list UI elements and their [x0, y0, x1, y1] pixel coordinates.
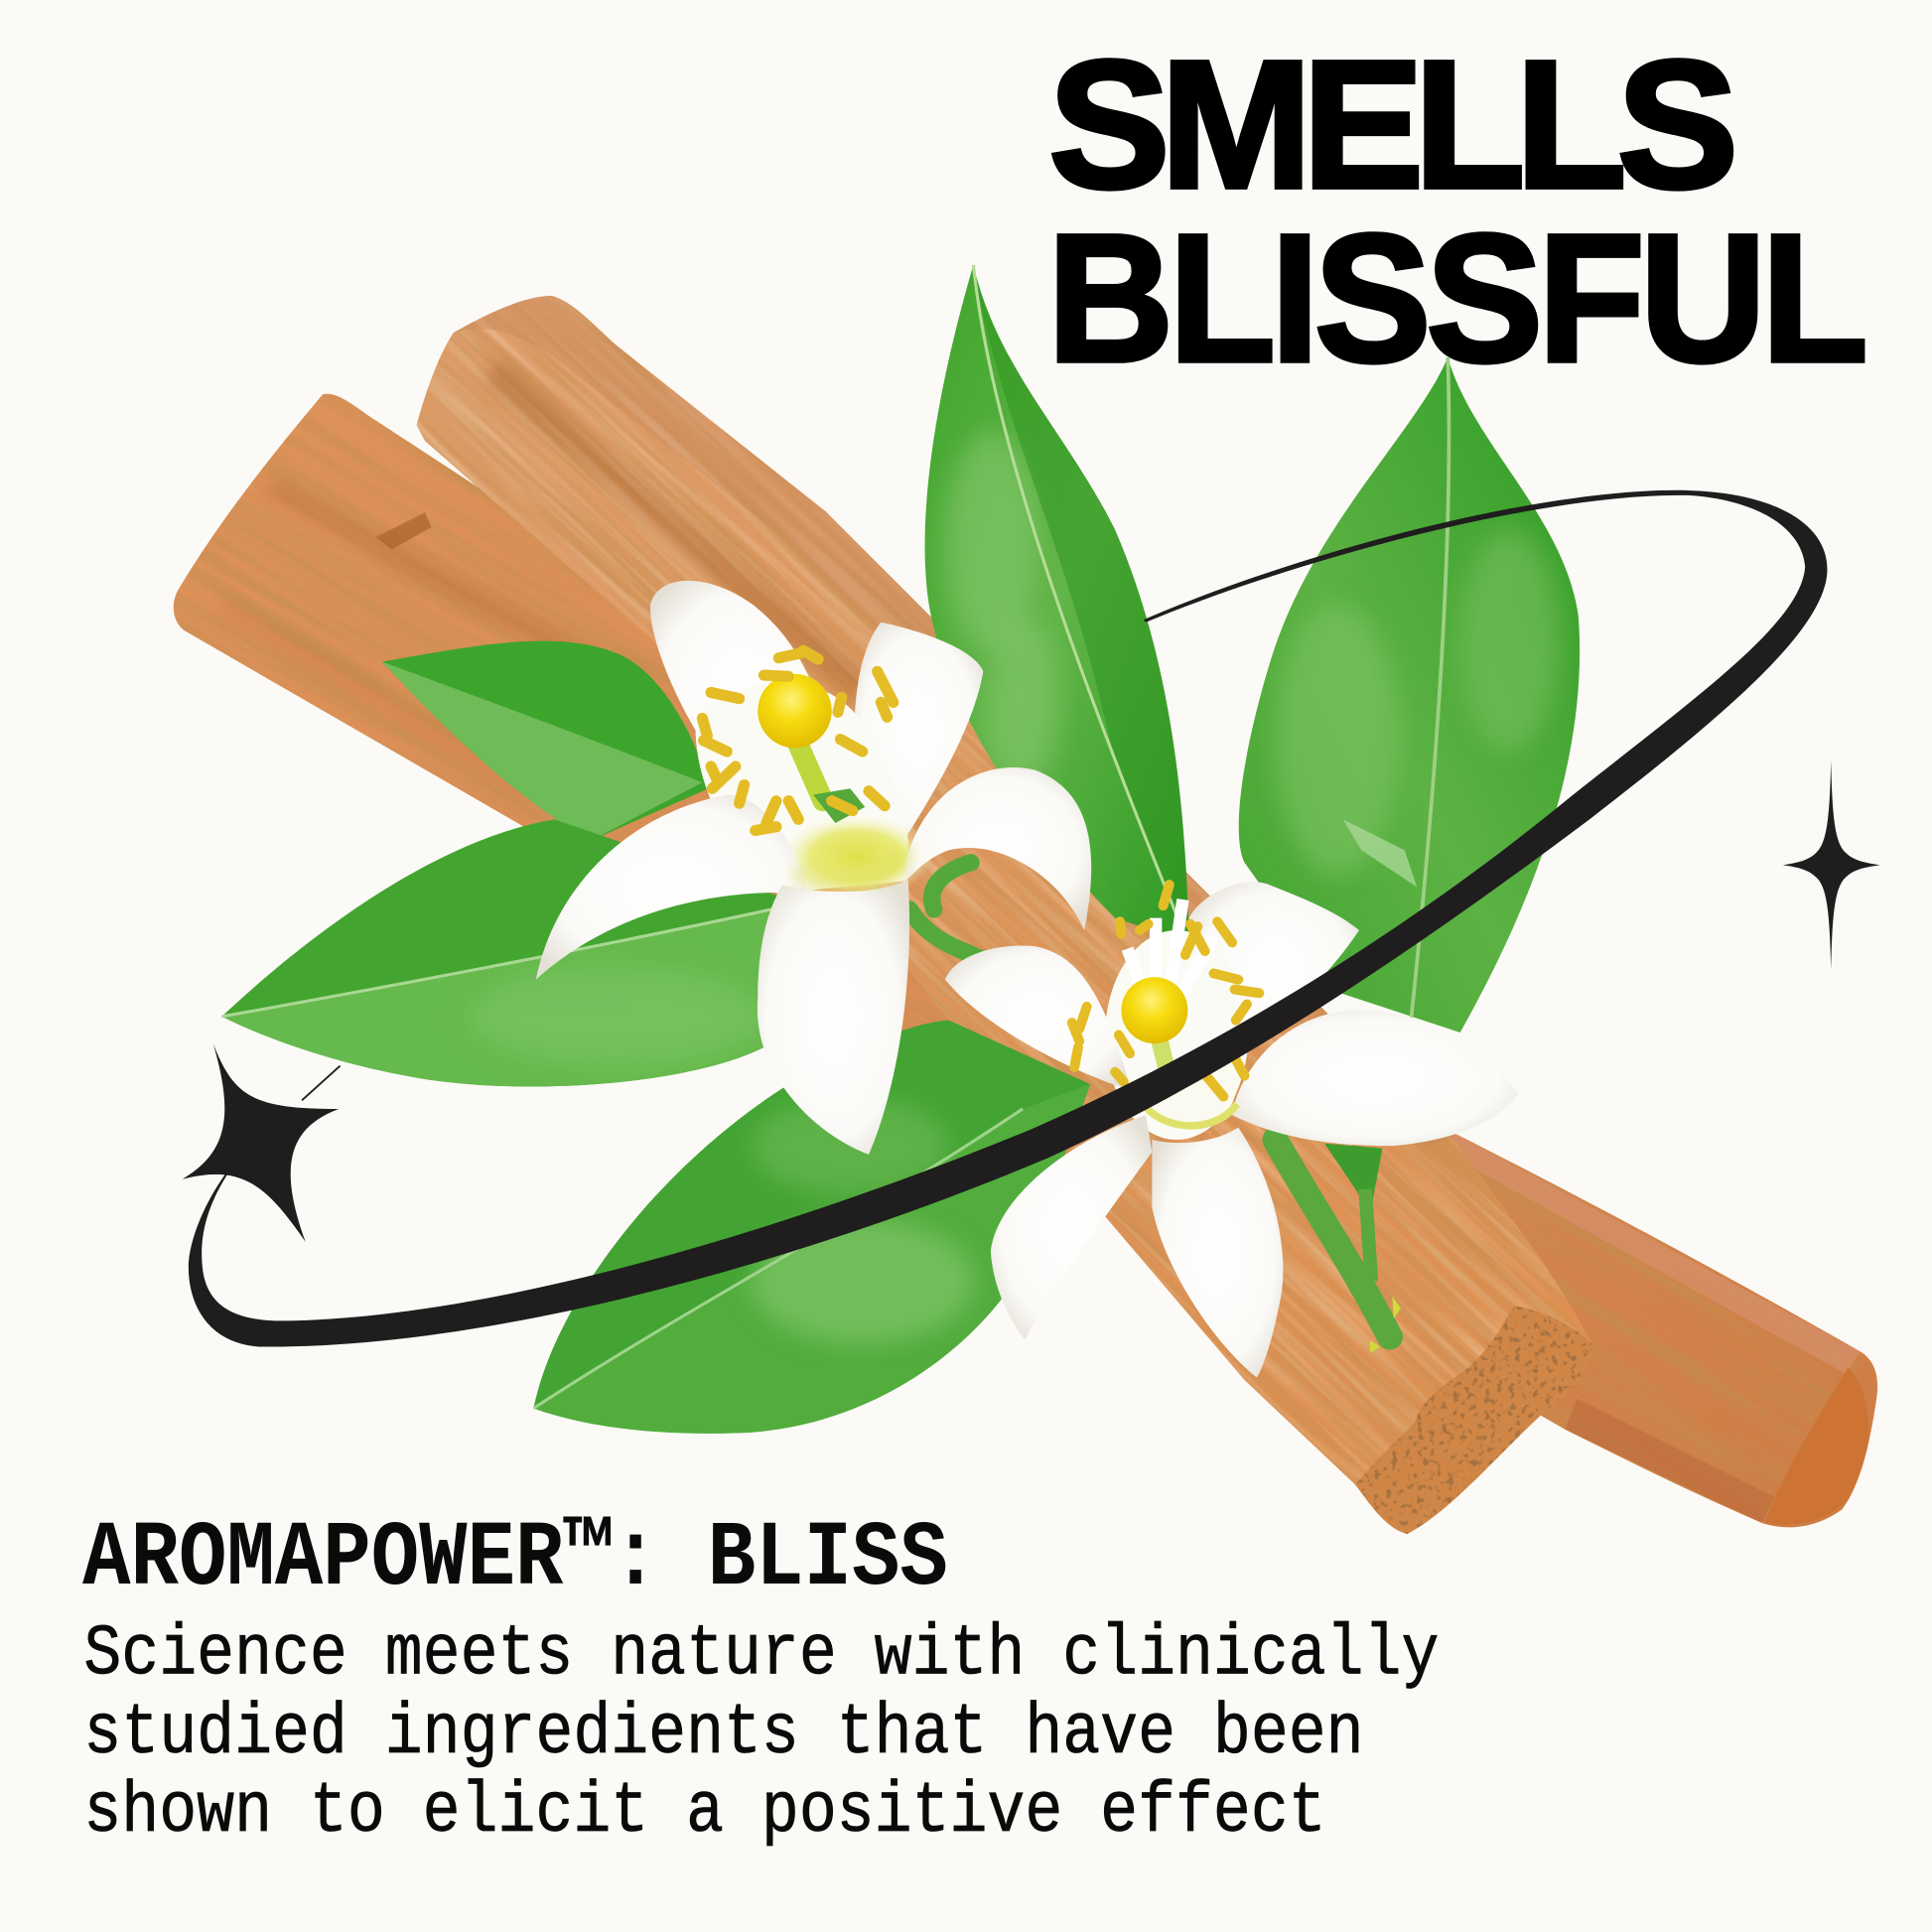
- leaf: tall top centre: [925, 265, 1189, 942]
- front sandalwood stick: [417, 296, 1591, 1535]
- leaf: tall right: [1239, 357, 1580, 1033]
- upper flower stem: [909, 863, 992, 964]
- body text: shown to elicit a positive effect: [83, 1773, 1326, 1854]
- orbit ring: [189, 490, 1828, 1347]
- pistil base: [813, 788, 865, 823]
- petal: top left: [650, 581, 832, 788]
- petal: lower left: [991, 1115, 1152, 1339]
- inner backing: [1105, 930, 1248, 1140]
- pistil ball: [758, 674, 832, 748]
- sepal leaflet: [1324, 1144, 1382, 1213]
- illustration: sandalwood sticks, leaves and flowers: [173, 264, 1878, 1535]
- petal: right: [1232, 1011, 1518, 1146]
- flower: lower right blossom: [945, 882, 1518, 1378]
- heading: AromaPower Bliss: AROMAPOWER™: BLISS: [82, 1507, 948, 1612]
- petal: left: [536, 794, 807, 980]
- petal: right: [905, 767, 1091, 930]
- orbit thin tail: [302, 1066, 341, 1100]
- title: BLISSFUL: [1047, 197, 1868, 400]
- petal: left: [945, 945, 1131, 1090]
- petal: top right: [1189, 882, 1359, 1053]
- leaf: big left: [221, 819, 788, 1087]
- flower: upper left blossom: [536, 581, 1091, 1155]
- back sandalwood stick: [173, 393, 1878, 1527]
- title: [1047, 23, 1868, 400]
- body text: [83, 1615, 1439, 1854]
- stamen filaments: [1128, 899, 1213, 998]
- body text: studied ingredients that have been: [83, 1694, 1364, 1774]
- inner petals: [696, 682, 908, 894]
- stamens: [702, 650, 894, 830]
- body text: Science meets nature with clinically: [83, 1615, 1439, 1696]
- bud tips: [1370, 1297, 1401, 1353]
- petal: bottom: [1152, 1128, 1283, 1378]
- burnt end face: [1349, 1300, 1595, 1540]
- icon: four-point star right: [1783, 760, 1880, 970]
- petal: top right: [854, 622, 983, 838]
- pistil ball: [1121, 977, 1187, 1043]
- branch: [1365, 1189, 1371, 1282]
- cup rim: [1140, 1099, 1237, 1126]
- pistil stalk: [1159, 1035, 1171, 1084]
- icon: four-point star left: [183, 1043, 339, 1242]
- centre cup: [1140, 1051, 1239, 1131]
- leaf: small upper left: [382, 641, 709, 840]
- leaf: big bottom: [533, 1021, 1090, 1434]
- calyx rim: [794, 850, 909, 885]
- pistil style: [796, 740, 823, 801]
- stem: [1276, 1140, 1390, 1337]
- calyx glow: [780, 814, 932, 898]
- petal: bottom: [758, 880, 909, 1155]
- stamens: [1072, 885, 1259, 1097]
- title: SMELLS: [1048, 23, 1738, 226]
